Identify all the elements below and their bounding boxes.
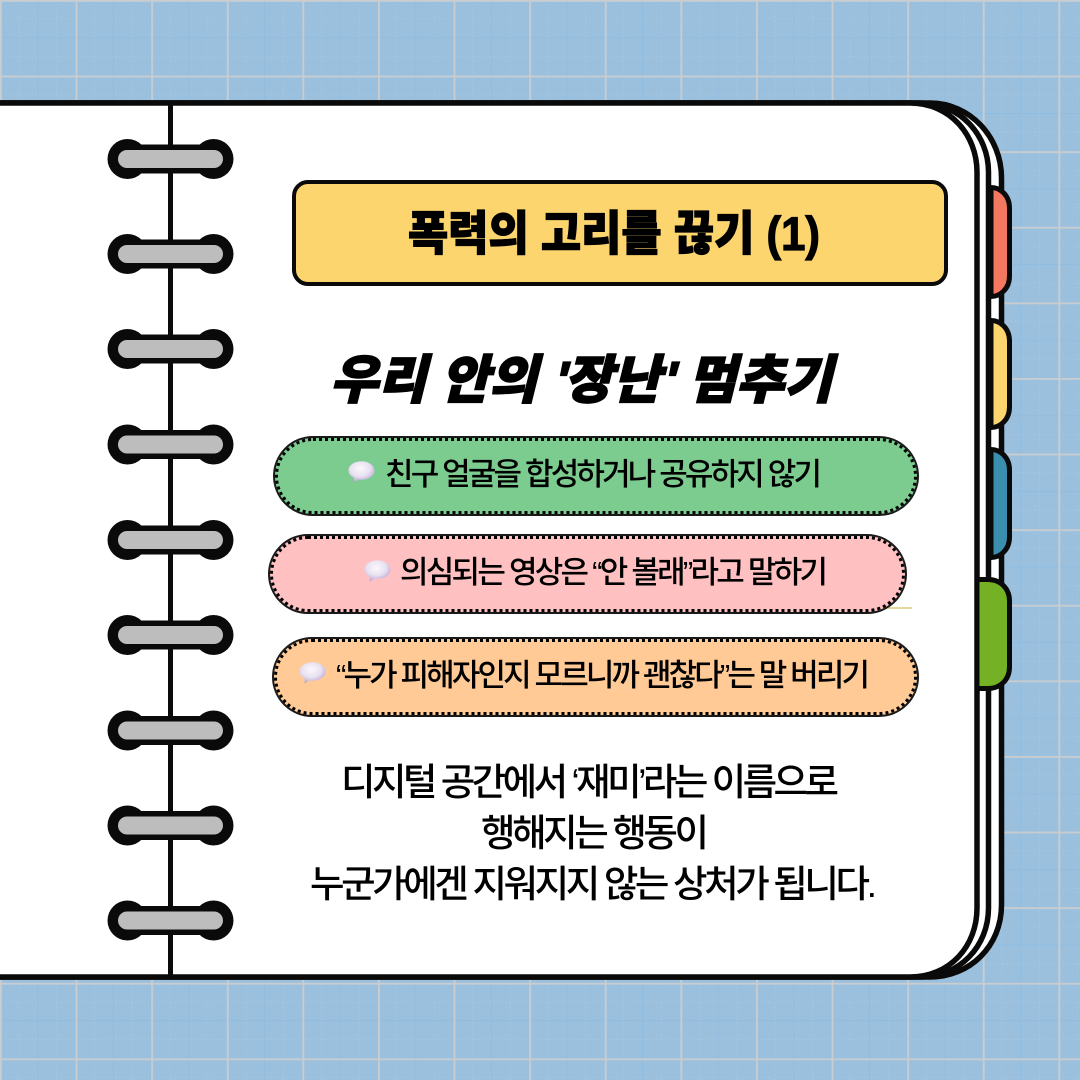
spiral binding rings [108,139,234,940]
title text: 폭력의 고리를 끊기 (1) [408,207,820,260]
pill text: 의심되는 영상은 “안 볼래”라고 말하기 [400,555,828,590]
panel: notebook front page [0,103,977,977]
icon: blue index tab [991,450,1010,558]
subtitle: 우리 안의 '장난' 멈추기 [327,352,844,410]
pill: green tip [274,437,918,515]
pill text: “누가 피해자인지 모르니까 괜찮다”는 말 버리기 [336,658,870,693]
title banner [294,182,946,284]
pill: orange tip [273,638,918,716]
body text: 행해지는 행동이 [481,812,709,854]
stray yellow line [888,608,912,609]
icon: yellow index tab [991,320,1010,428]
spine line [168,105,173,975]
body text [310,761,877,905]
icon: speech bubble [348,461,375,482]
body text: 누군가에겐 지워지지 않는 상처가 됩니다. [310,863,877,905]
panel: notebook back pages [0,103,1002,977]
icon: speech bubble [299,662,326,683]
icon: coral index tab [991,188,1010,296]
body text: 디지털 공간에서 ‘재미’라는 이름으로 [341,761,839,803]
pill: pink tip [269,535,906,613]
pill text: 친구 얼굴을 합성하거나 공유하지 않기 [385,457,822,492]
icon: speech bubble [364,560,391,581]
icon: green active index tab [977,580,1010,688]
